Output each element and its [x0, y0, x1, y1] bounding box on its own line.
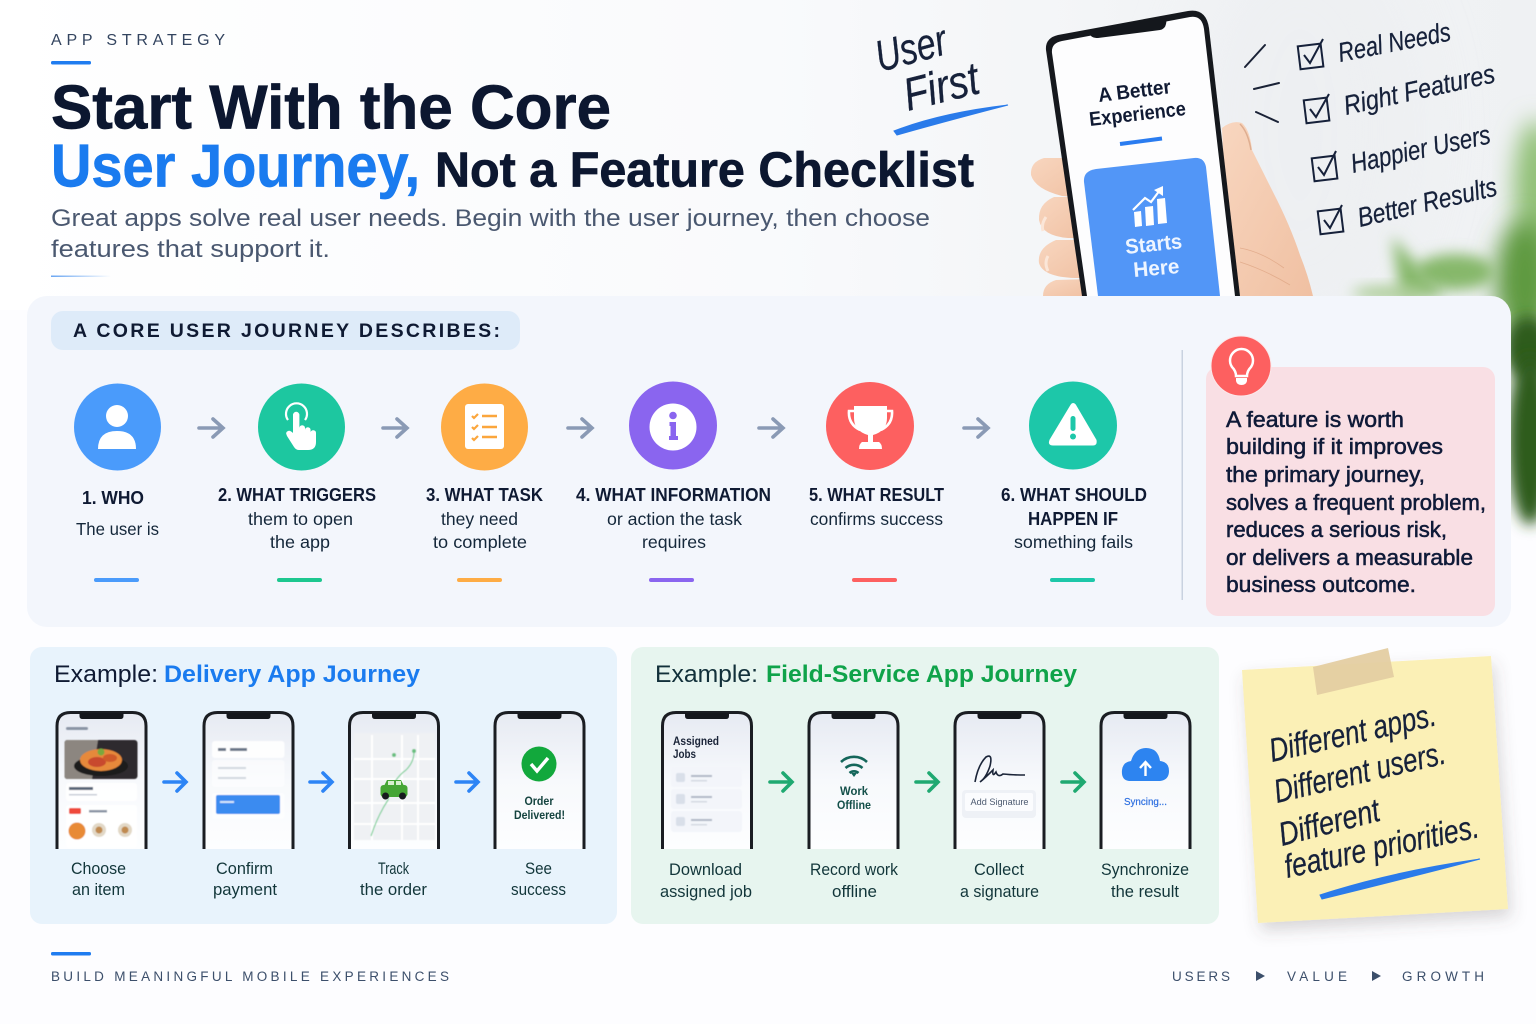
label: See	[525, 859, 552, 878]
step 5: what result	[809, 382, 944, 582]
icon: light bulb	[1211, 336, 1271, 396]
item: real needs: Real Needs	[1335, 17, 1453, 68]
label	[960, 860, 1039, 901]
blue card	[1084, 158, 1220, 296]
callout text: business outcome.	[1226, 572, 1416, 597]
arrow	[770, 773, 792, 791]
phone: syncing	[1101, 712, 1190, 849]
step 1: who: The user is	[76, 519, 159, 539]
item: happier users	[1312, 120, 1493, 181]
label	[213, 859, 277, 899]
card caption: Starts	[1124, 230, 1183, 259]
label: Confirm	[216, 859, 273, 878]
item: better results	[1318, 172, 1500, 234]
callout text	[1226, 407, 1486, 597]
callout text: reduces a serious risk,	[1226, 517, 1447, 542]
item: right features	[1304, 58, 1498, 123]
step 4: what information: 4. WHAT INFORMATION	[576, 485, 771, 505]
card caption: Here	[1132, 255, 1180, 282]
checklist	[1298, 17, 1500, 234]
panel heading	[54, 661, 421, 688]
section heading pill: A CORE USER JOURNEY DESCRIBES:	[73, 320, 500, 342]
footer right: GROWTH	[1402, 969, 1484, 984]
step 6: what should happen: 6. WHAT SHOULD	[1001, 485, 1147, 505]
step 4: what information: requires	[642, 532, 706, 552]
label: Download	[669, 860, 742, 879]
item: better results: Better Results	[1355, 172, 1500, 233]
panel: field-service app journey	[631, 647, 1219, 924]
fingers and palm behind phone	[1031, 122, 1313, 296]
food photo	[64, 740, 138, 779]
section heading pill	[51, 311, 520, 350]
footer left	[51, 952, 449, 984]
callout: when to build a feature	[1206, 336, 1495, 616]
arrow	[383, 419, 407, 437]
phone: confirm payment	[204, 712, 293, 849]
label: a signature	[960, 882, 1039, 901]
label: success	[511, 880, 566, 899]
callout text: solves a frequent problem,	[1226, 490, 1486, 515]
handwritten note: user first: User	[870, 15, 954, 82]
chart icon	[1133, 186, 1167, 227]
label: the result	[1111, 882, 1179, 901]
step 5: what result: 5. WHAT RESULT	[809, 485, 944, 505]
step 2: what triggers: the app	[270, 532, 330, 552]
footer left: BUILD MEANINGFUL MOBILE EXPERIENCES	[51, 969, 449, 984]
arrow	[964, 419, 988, 437]
arrow	[916, 773, 938, 791]
screen heading	[1088, 76, 1187, 131]
tape	[1313, 648, 1394, 695]
arrow	[1062, 773, 1084, 791]
step 2: what triggers	[218, 384, 376, 582]
title	[51, 74, 974, 200]
handwritten note: user first: First	[898, 51, 986, 121]
sticky text: Different	[1274, 791, 1385, 853]
item: happier users: Happier Users	[1348, 120, 1493, 179]
label: payment	[213, 880, 277, 899]
car	[380, 780, 408, 800]
label: assigned job	[660, 882, 752, 901]
footer right: VALUE	[1287, 969, 1347, 984]
phone: work offline: Work	[840, 786, 869, 798]
screen heading: A Better	[1097, 76, 1172, 107]
sticky text	[1265, 696, 1482, 885]
title: User Journey,	[51, 132, 420, 200]
phone: track the order	[350, 712, 438, 849]
title: Start With the Core	[51, 74, 611, 142]
label	[360, 859, 427, 899]
panel: delivery app journey	[30, 647, 617, 924]
panel heading: Delivery App Journey	[164, 661, 421, 688]
footer right: USERS	[1172, 969, 1230, 984]
title: Not a Feature Checklist	[435, 144, 974, 198]
phone: order delivered: Order	[524, 796, 554, 808]
label: an item	[72, 880, 125, 899]
phone body	[1046, 11, 1240, 296]
phone: add signature: Add Signature	[970, 797, 1028, 807]
label: Collect	[974, 860, 1024, 879]
label: offline	[832, 882, 877, 901]
step 3: what task: to complete	[433, 532, 527, 552]
callout text: A feature is worth	[1226, 407, 1404, 432]
item: real needs	[1298, 17, 1453, 69]
label: Synchronize	[1101, 860, 1189, 879]
callout text: building if it improves	[1226, 434, 1443, 459]
step 2: what triggers: them to open	[248, 509, 353, 529]
label	[1101, 860, 1189, 901]
handwritten note: user first	[870, 15, 1008, 135]
step 3: what task: they need	[441, 509, 518, 529]
panel: core user journey	[27, 296, 1511, 627]
blue underline	[1320, 859, 1480, 899]
sticky note	[1242, 648, 1508, 923]
phone: work offline	[809, 712, 898, 849]
arrow	[199, 419, 223, 437]
phone: assigned jobs	[662, 712, 752, 849]
label: Choose	[71, 859, 126, 878]
arrow	[164, 773, 186, 791]
screen heading: Experience	[1088, 98, 1187, 131]
phone: choose an item	[57, 712, 146, 849]
eyebrow accent bar	[51, 61, 91, 64]
step 6: what should happen	[1001, 382, 1147, 582]
step 1: who	[74, 384, 161, 582]
map	[354, 733, 435, 840]
hand holding phone	[1031, 11, 1313, 296]
callout text: or delivers a measurable	[1226, 545, 1473, 570]
label: Record work	[810, 860, 898, 879]
card caption	[1124, 230, 1183, 282]
step 2: what triggers: 2. WHAT TRIGGERS	[218, 485, 376, 505]
label	[71, 859, 126, 899]
sticky text: Different apps.	[1265, 696, 1439, 769]
phone: syncing: Syncing...	[1124, 796, 1167, 808]
subtitle: Great apps solve real user needs. Begin with the user journey, then choose	[51, 205, 930, 232]
step 4: what information: or action the task	[607, 509, 742, 529]
sticky text: feature priorities.	[1281, 807, 1482, 885]
step 3: what task: 3. WHAT TASK	[426, 485, 543, 505]
emphasis ticks	[1245, 45, 1279, 122]
arrow	[456, 773, 478, 791]
phone: work offline: Offline	[837, 800, 871, 812]
footer right	[1172, 969, 1484, 984]
panel heading: Example:	[655, 661, 758, 688]
callout text: the primary journey,	[1226, 462, 1425, 487]
phone: assigned jobs: Jobs	[673, 749, 696, 761]
phone: assigned jobs: Assigned	[673, 736, 719, 748]
label: Track	[378, 859, 409, 878]
step 6: what should happen: something fails	[1014, 532, 1133, 552]
subtitle	[51, 205, 930, 263]
phone: add signature	[955, 712, 1044, 849]
eyebrow: app strategy: APP STRATEGY	[51, 32, 225, 49]
label: the order	[360, 880, 427, 899]
subtitle: features that support it.	[51, 236, 330, 263]
arrow	[759, 419, 783, 437]
phone: order delivered	[495, 712, 584, 849]
phone: order delivered: Delivered!	[514, 810, 565, 822]
arrow	[568, 419, 592, 437]
item: right features: Right Features	[1341, 58, 1498, 121]
label	[810, 860, 898, 901]
step 6: what should happen: HAPPEN IF	[1028, 509, 1118, 529]
step 4: what information	[576, 382, 771, 582]
arrow	[310, 773, 332, 791]
step 1: who: 1. WHO	[82, 488, 144, 508]
panel heading: Example:	[54, 661, 158, 688]
step 5: what result: confirms success	[810, 509, 943, 529]
label	[660, 860, 752, 901]
sticky text: Different users.	[1270, 734, 1449, 810]
label	[511, 859, 566, 899]
plant background	[1352, 120, 1536, 525]
step 3: what task	[426, 384, 543, 582]
panel heading: Field-Service App Journey	[766, 661, 1078, 688]
